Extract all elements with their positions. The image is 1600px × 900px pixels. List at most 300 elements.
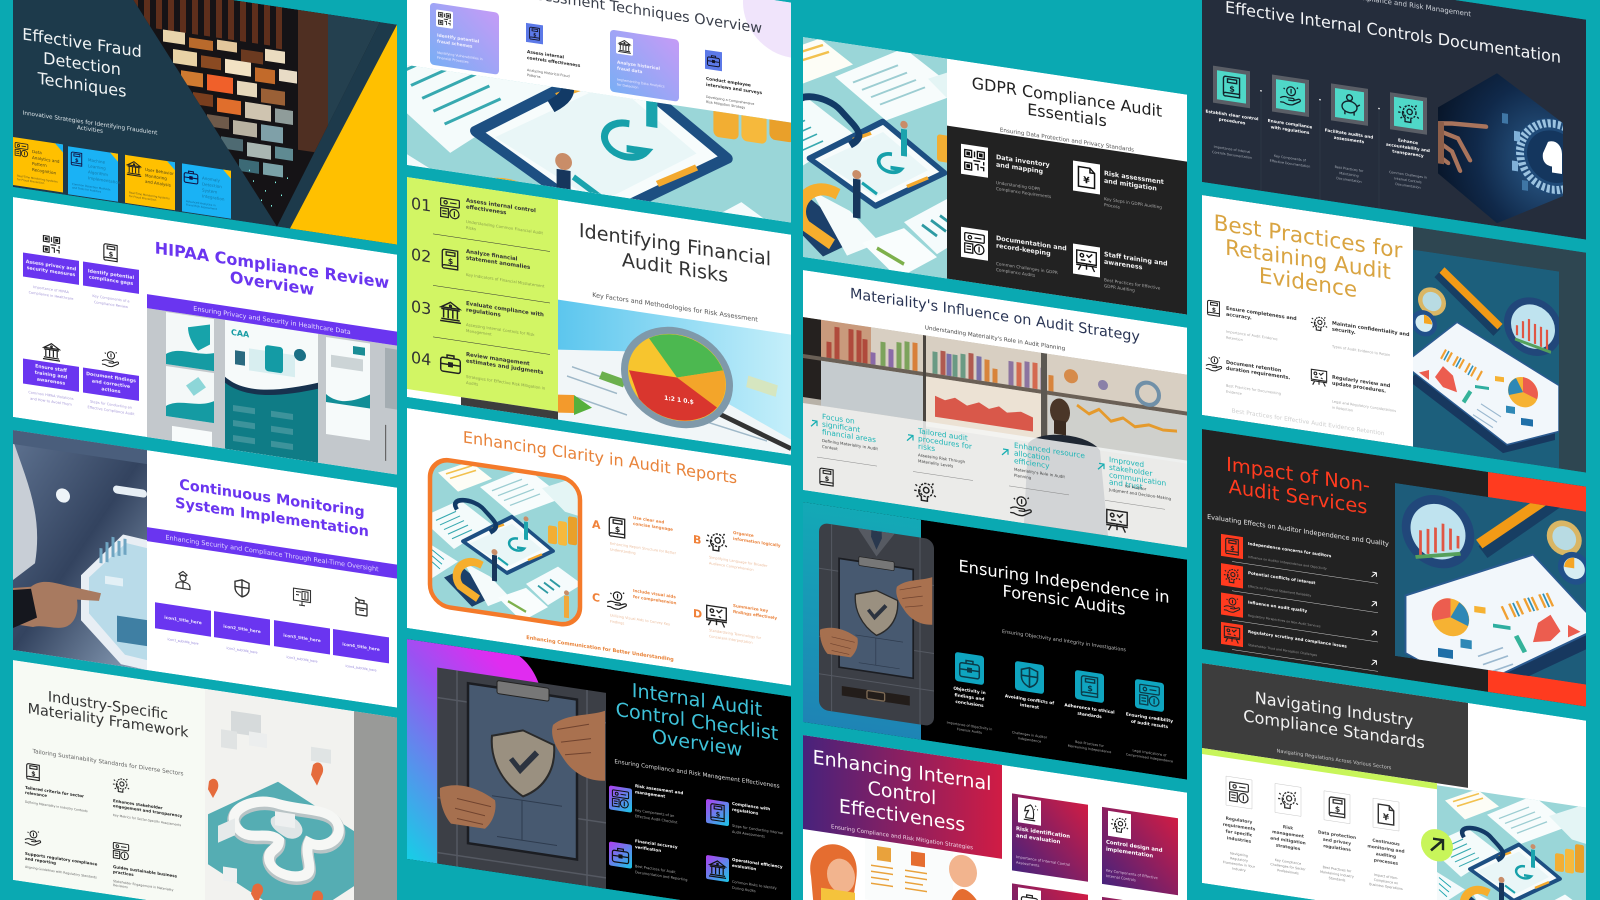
card: data analytics: Recognition — [32, 167, 56, 176]
item 3: verification — [635, 844, 661, 853]
item 2: management — [1272, 829, 1304, 840]
item D: findings effectively — [733, 609, 777, 621]
card row: icon1_subtitle_here — [168, 637, 198, 646]
row 01: Risks — [466, 225, 476, 231]
step 4: accountability and — [1386, 142, 1430, 153]
title: Navigating Industry — [1255, 688, 1414, 731]
image: charts and magnifier — [1403, 248, 1562, 469]
row 04: Strategies for Effective Risk Mitigation in — [466, 374, 546, 391]
panel: Effective Fraud Detection Techniques — [13, 0, 397, 245]
column 4: for Auditor — [1125, 483, 1147, 492]
title: Retaining Audit — [1225, 236, 1391, 285]
card: anomaly detection: Detection — [202, 181, 222, 189]
card: staff training: training and — [35, 370, 67, 381]
card: machine learning — [68, 146, 121, 202]
panel: GDPR Compliance Audit Essentials — [700, 0, 1187, 382]
column 4: and trust — [1109, 477, 1143, 491]
item 1 — [609, 779, 683, 825]
column 4: communication — [1109, 470, 1166, 488]
item 1: Tailored criteria for sector — [25, 785, 84, 799]
image: magnifier gauge — [558, 300, 791, 455]
card: anomaly detection: Integration — [202, 193, 225, 202]
overlay — [803, 403, 1187, 548]
item 1: management — [635, 789, 665, 799]
image: tablet audit scene — [407, 65, 791, 222]
title: Compliance Standards — [1243, 706, 1425, 752]
item 1: relevance — [25, 790, 47, 798]
item 3: Maintaining Industry — [1320, 870, 1354, 879]
item 1 — [25, 763, 88, 813]
item 4: During Audits — [732, 886, 756, 893]
item 4: Risk Mitigation Strategy — [706, 100, 745, 110]
item 4: Developing a Comprehensive — [706, 95, 754, 106]
column 4: Improved — [1109, 455, 1144, 469]
step 1: Establish clear control — [1206, 109, 1259, 122]
item 4: Legal and Regulatory Considerations — [1332, 400, 1396, 413]
row 01: 01 — [411, 194, 431, 216]
item 1: Risk assessment and — [635, 783, 683, 795]
item 4: auditing — [1376, 851, 1396, 860]
card row: icon4_title_here — [342, 641, 380, 652]
subtitle: Ensuring Compliance and Risk Mitigation Strategies — [831, 824, 973, 852]
item 4: practices — [113, 869, 134, 877]
column 4 — [1098, 453, 1172, 540]
lime band — [1202, 748, 1437, 789]
item D: D — [693, 607, 702, 621]
item B: Audience Comprehension — [709, 561, 754, 572]
step 1 — [1206, 65, 1262, 161]
card: data analytics: Analytics and — [32, 155, 60, 164]
card 1: Identify potential — [437, 33, 480, 45]
row 03: regulations — [466, 307, 501, 319]
card: privacy and security: security measures — [27, 265, 75, 278]
hexagon photo: hand and AI head — [1432, 56, 1591, 240]
column 3: Planning — [1014, 473, 1032, 480]
title: Effectiveness — [839, 794, 965, 836]
item 4 — [1073, 244, 1168, 298]
item 3: duration requirements. — [1226, 366, 1290, 381]
title: Detection — [43, 49, 121, 79]
card: machine learning: Common Detection Methods — [72, 182, 111, 192]
row 01: Assess internal control — [466, 198, 536, 214]
title: Control Checklist — [616, 698, 779, 745]
item 3: Common Challenges in GDPR — [996, 261, 1058, 275]
step 3: Facilitate audits and — [1325, 127, 1373, 140]
column 2 — [907, 425, 973, 508]
item 1: Retention — [1226, 336, 1243, 342]
card: privacy and security: Importance of HIPAA — [33, 285, 70, 294]
row 3: Influence on audit quality — [1248, 600, 1308, 613]
icon row — [176, 570, 367, 616]
card: data analytics: Pattern — [32, 161, 47, 168]
card row: icon3_title_here — [283, 633, 321, 643]
item 3 — [609, 834, 688, 882]
card 1: Assessments — [1016, 860, 1040, 868]
item 2: engagement and transparency — [113, 803, 183, 818]
card: data analytics: Real-Time Monitoring Systems — [17, 174, 58, 184]
column 2: procedures for — [918, 434, 973, 451]
item 4: processes — [1374, 857, 1398, 867]
item 2 — [1311, 315, 1410, 360]
card: anomaly detection: Fraud Risk Assessment — [186, 202, 217, 211]
title: Continuous Monitoring — [179, 477, 365, 521]
row 04: Review management — [466, 352, 530, 367]
item 3: record-keeping — [996, 241, 1051, 258]
step 4 — [1386, 92, 1430, 191]
row 01 — [411, 190, 550, 251]
image: brochure posters — [147, 308, 397, 475]
item 4: Legal Implications of — [1133, 748, 1167, 758]
title: Overview — [230, 268, 314, 299]
card: anomaly detection: Anomaly — [202, 175, 220, 183]
card: user behavior: Real-Time Monitoring Systems — [129, 190, 170, 201]
card row: icon1_title_here — [164, 615, 202, 625]
card 3 — [1012, 883, 1088, 900]
item 2: Patterns — [527, 73, 541, 79]
item 3 — [1318, 790, 1356, 884]
row 4: Regulatory scrutiny and compliance issues — [1248, 629, 1347, 649]
purple banner: Enhancing Security and Compliance Through Real-Time Oversight — [165, 533, 379, 573]
item 1: Frameworks in Your — [1223, 860, 1256, 869]
step 4: Internal Controls — [1394, 176, 1422, 184]
title: System Implementation — [175, 495, 369, 540]
image: tablet audit scene — [1397, 739, 1600, 900]
item 2: Risk assessment — [1104, 169, 1164, 186]
item 4: in Retention — [1332, 406, 1353, 413]
row 3 — [1221, 592, 1378, 642]
framed image — [390, 411, 630, 677]
panel: Impact of Non-Audit Services — [1202, 429, 1600, 720]
item 4: Ensuring credibility — [1126, 711, 1173, 725]
row 04: estimates and judgments — [466, 358, 543, 376]
card: machine learning: Machine — [88, 157, 106, 165]
item 2 — [526, 22, 580, 78]
step 1: Importance of Internal — [1214, 145, 1250, 154]
step 2: Ensure compliance — [1268, 118, 1312, 130]
item 2: security. — [1332, 327, 1356, 336]
item 2 — [1073, 160, 1164, 216]
item 1: findings and — [955, 692, 984, 703]
image: conveyor logistics — [205, 689, 354, 900]
subtitle: Key Factors and Methodologies for Risk Assessment — [592, 291, 758, 324]
card row — [155, 602, 389, 674]
card row: icon2_subtitle_here — [227, 646, 257, 655]
item 1: Importance of Audit Evidence — [1226, 330, 1278, 341]
row 2 — [1221, 563, 1378, 613]
panel: Industry-Specific Materiality Framework — [13, 660, 397, 900]
column 1: Context — [822, 444, 838, 451]
item 3: standards — [1077, 711, 1102, 720]
column 2: risks — [918, 442, 935, 453]
step 4: transparency — [1392, 149, 1424, 158]
item B: information logically — [733, 536, 781, 548]
row 01: effectiveness — [466, 204, 506, 216]
item 1: Navigating — [1230, 851, 1248, 858]
card: user behavior: User Behavior — [145, 167, 174, 176]
card 1: Importance of Internal Control — [1016, 855, 1070, 867]
item 2: Analyzing Historical Fraud — [527, 68, 570, 78]
item 1: Key Components of an — [635, 808, 674, 818]
item 1 — [1223, 776, 1256, 874]
item B: Simplifying Language for Broader — [709, 555, 768, 568]
item 2: Professionals — [1277, 868, 1299, 876]
title: Audit Services — [1229, 475, 1367, 519]
item 4: Impact of Non- — [1374, 873, 1399, 881]
item 3: and privacy — [1323, 837, 1351, 847]
panel: Identifying Financial Audit Risks — [407, 177, 791, 455]
step 2: with regulations — [1271, 124, 1310, 135]
column 2: Tailored audit — [917, 426, 968, 443]
item 2: interest — [1020, 702, 1039, 711]
subtitle: Ensuring Compliance and Risk Management Effectiveness — [614, 759, 780, 790]
item 1: Objectivity in — [953, 686, 986, 696]
step 2: Key Components of — [1274, 154, 1307, 163]
item C: Findings — [610, 619, 625, 626]
column 3: Enhanced resource — [1014, 441, 1085, 460]
item D — [693, 597, 777, 649]
title: Best Practices for — [1214, 211, 1402, 264]
step 2 — [1268, 74, 1321, 170]
card: privacy and security: Compliance in Healthcare — [29, 290, 73, 301]
item 2: Key Steps in GDPR Auditing — [1104, 196, 1162, 210]
card row: icon2_title_here — [223, 624, 261, 634]
title: Audit Risks — [622, 248, 728, 287]
card: staff training: Ensure staff — [35, 363, 67, 374]
row 03: Evaluate compliance with — [466, 301, 544, 319]
gradient corner — [407, 639, 543, 879]
lavender circle — [743, 0, 791, 58]
item 4 — [706, 853, 783, 897]
step 1: Controls Documentation — [1212, 150, 1252, 160]
item 1: requirements — [1223, 822, 1256, 833]
title: Materiality Framework — [28, 701, 189, 741]
card: user behavior — [125, 155, 175, 210]
step 4: Documentation — [1395, 182, 1421, 190]
row 02 — [411, 241, 550, 303]
card: user behavior: and Analysis — [145, 179, 171, 188]
item C: Utilizing Visual Aids to Convey Key — [610, 613, 670, 626]
item 4: awareness — [1104, 258, 1143, 271]
card: data analytics: for Fraud Prevention — [17, 177, 45, 185]
row 03 — [411, 293, 550, 354]
item 2: Audit Assessments — [732, 830, 765, 839]
step 2: Effective Documentation — [1270, 159, 1310, 169]
item 1 — [961, 144, 1051, 199]
item 2: Enhances stakeholder — [113, 798, 163, 810]
card: privacy and security — [23, 232, 79, 302]
card 1: and evaluation — [1016, 833, 1061, 846]
title: Identifying Financial — [579, 219, 771, 271]
panel: Continuous Monitoring System Implementation — [13, 430, 397, 708]
title: Industry-Specific — [48, 689, 168, 723]
row 03: Management — [466, 328, 492, 337]
item 4: Compliance on — [1374, 878, 1398, 885]
card: document findings: Document findings — [86, 371, 136, 384]
item 4: interviews and surveys — [706, 82, 762, 96]
card: document findings — [83, 347, 139, 417]
card row: icon3_subtitle_here — [287, 655, 317, 664]
item 1: Effective Audit Checklist — [635, 814, 678, 825]
card: anomaly detection — [182, 163, 231, 219]
item 3: regulations — [1323, 843, 1351, 853]
title: Essentials — [1027, 100, 1107, 131]
panel: Enhancing Clarity in Audit Reports — [390, 405, 791, 702]
panel: HIPAA Compliance Review Overview — [13, 197, 397, 475]
title: Ensuring Independence in — [958, 556, 1170, 607]
item 3: Best Practices for Audit — [635, 864, 676, 874]
item B: Organize — [733, 530, 754, 538]
column 1: Defining Materiality in Audit — [822, 438, 878, 451]
row 02: 02 — [411, 245, 431, 267]
card: data analytics: Data — [32, 149, 42, 155]
step 3: Documentation — [1336, 176, 1362, 184]
item 2: Types of Audit Evidence to Retain — [1331, 344, 1390, 357]
step 4: Common Challenges in — [1389, 170, 1427, 180]
row 02: Analyze financial — [466, 249, 518, 263]
purple banner: Ensuring Privacy and Security in Healthcare Data — [193, 305, 351, 336]
item 1: Importance of Objectivity in — [947, 721, 992, 731]
card 4 — [1102, 897, 1178, 900]
card: document findings: Effective Compliance Audit — [87, 405, 135, 416]
item 2: Avoiding conflicts of — [1005, 693, 1054, 707]
item 2: Assess internal — [527, 49, 564, 61]
item 4: update procedures. — [1332, 381, 1386, 395]
item 1: Data inventory — [996, 153, 1051, 169]
title: Techniques — [37, 69, 126, 101]
item 3: Best Practices for Documenting — [1226, 384, 1281, 396]
image: charts and magnifier — [1395, 471, 1600, 720]
item 3: Supports regulatory compliance — [25, 851, 98, 867]
item 3: Documentation and Reporting — [635, 870, 688, 882]
item 2: Steps for Conducting Internal — [732, 824, 783, 835]
row 04: 04 — [411, 348, 431, 370]
dark panel — [947, 126, 1187, 315]
step 3: assessments — [1334, 135, 1365, 144]
title: GDPR Compliance Audit — [972, 73, 1162, 121]
row 4: Stakeholder Trust and Perception Challenges — [1248, 643, 1318, 657]
card: compliance gaps — [83, 240, 139, 311]
card: document findings: actions — [101, 386, 121, 395]
teal side panel — [803, 502, 921, 740]
item A: Enhancing Report Structure for Better — [610, 541, 677, 555]
item A: Use clear and — [633, 515, 664, 525]
item B — [693, 524, 781, 576]
card: machine learning: and Tools for Auditors — [72, 185, 102, 194]
title: Evidence — [1259, 264, 1357, 303]
photo: suited auditor with clipboard — [791, 482, 961, 760]
item 4: Staff training and — [1104, 250, 1168, 268]
step 3 — [1325, 82, 1380, 187]
item 2 — [113, 777, 183, 827]
item 4: Conduct employee — [706, 76, 751, 89]
column 1: significant — [822, 420, 860, 434]
card: machine learning: Learning — [88, 163, 106, 171]
card: machine learning: Implementation — [88, 175, 121, 185]
item A: A — [592, 518, 601, 532]
item 2: controls effectiveness — [527, 55, 581, 69]
card 1: Identifying Vulnerabilities in — [437, 51, 483, 61]
photo: analyst facing charts — [803, 317, 1187, 548]
item 2: Maintain confidentiality and — [1332, 321, 1410, 338]
item 1: Compliance Requirements — [996, 186, 1051, 199]
column 4: stakeholder — [1109, 463, 1153, 478]
title: Materiality's Influence on Audit Strategy — [850, 286, 1140, 346]
card: compliance gaps: Compliance Review — [94, 300, 128, 309]
image: magnifier gauge: 1:2 1 0.$ — [664, 395, 694, 406]
panel: Internal Audit Control Checklist Overview — [397, 572, 791, 900]
card: staff training — [23, 339, 79, 408]
card 1: Risk identification — [1016, 826, 1070, 840]
item 1 — [1208, 300, 1297, 350]
item 4: Common Risks to Identify — [732, 880, 777, 890]
item 3: Standards — [1329, 876, 1346, 883]
item 3: Adherence to ethical — [1064, 702, 1115, 716]
title: Effective Fraud — [22, 24, 142, 61]
item 3: Evidence — [1226, 390, 1242, 396]
item 2 — [1270, 783, 1306, 877]
item 2: Challenges for Sector — [1270, 862, 1306, 872]
item 1: Industry — [1232, 867, 1246, 873]
card 1 — [1012, 793, 1088, 882]
item 3 — [25, 830, 98, 880]
card 3: Analyze historical — [617, 60, 661, 72]
item 3: Compliance Audits — [996, 267, 1035, 278]
item 4: Operational efficiency — [732, 857, 783, 869]
step 4: Enhance — [1398, 137, 1418, 145]
item 4: Stakeholder Engagement in Materiality — [113, 879, 174, 892]
card 3: for Detection — [617, 83, 638, 90]
item 3: Data protection — [1318, 829, 1356, 841]
row 2: Effects on Financial Statement Reliability — [1248, 584, 1311, 598]
step 3: Maintaining — [1339, 171, 1359, 178]
item 4 — [1367, 797, 1405, 891]
card: compliance gaps: Identify potential — [88, 268, 134, 281]
card: document findings: and corrective — [92, 378, 130, 390]
purple banner — [147, 527, 397, 579]
item 4 — [1311, 369, 1396, 419]
item 4: Decisions — [113, 883, 128, 889]
footer note: Enhancing Communication for Better Understanding — [526, 635, 674, 663]
card: machine learning: Algorithm — [88, 169, 108, 177]
item 1: Ensure completeness and — [1226, 306, 1297, 322]
item A: concise language — [633, 521, 673, 532]
item 4: Continuous — [1372, 838, 1400, 848]
item D: Consistent Interpretation — [709, 634, 753, 645]
title: Forensic Audits — [1002, 582, 1126, 619]
item 3 — [1206, 355, 1290, 403]
item 3 — [1064, 668, 1115, 755]
item 2: Compliance with — [732, 801, 770, 811]
row 3: Regulatory Perspectives on Non-Audit Services — [1248, 614, 1321, 628]
item 1: Regulatory — [1230, 856, 1248, 863]
item 1: Regulatory — [1226, 816, 1252, 826]
item C — [592, 582, 676, 633]
item D: Summarize key — [733, 603, 768, 613]
card: staff training: awareness — [37, 377, 65, 387]
image: tablet audit scene — [700, 0, 1060, 363]
column 4: Judgment and Decision-Making — [1108, 487, 1172, 501]
card 2: Internal Controls — [1106, 874, 1136, 882]
item 4: of audit results — [1131, 719, 1168, 730]
item 1: Forensic Audits — [957, 727, 982, 735]
subtitle: Tailoring Sustainability Standards for Diverse Sectors — [32, 749, 183, 778]
row 02: Key Indicators of Financial Misstatement — [466, 272, 545, 289]
card: data analytics — [13, 137, 63, 192]
item 3: Documentation and — [996, 234, 1067, 253]
item 3: and reporting — [25, 856, 56, 865]
card: staff training: Common HIPAA Violations — [28, 390, 74, 401]
card: compliance gaps: compliance gaps — [89, 274, 133, 287]
